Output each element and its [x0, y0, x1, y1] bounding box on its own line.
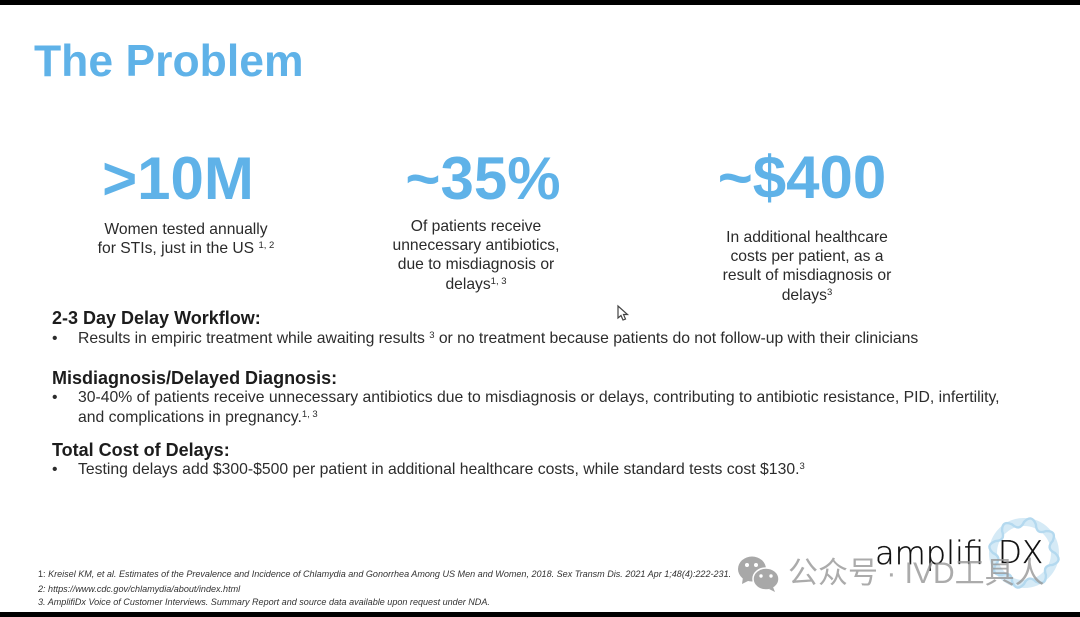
stat description: costs per patient, as a: [730, 248, 884, 265]
section: misdiagnosis: [52, 368, 1000, 426]
bullet text: Testing delays add $300-$500 per patient in additional healthcare costs, while standard tests cost $130.3: [78, 461, 805, 478]
stat description: [98, 221, 274, 257]
bullet: •: [52, 389, 58, 406]
stat description: delays3: [782, 287, 832, 304]
bullet text: and complications in pregnancy.1, 3: [78, 408, 318, 426]
footnotes: 1: Kreisel KM, et al. Estimates of the Prevalence and Incidence of Chlamydia and Gonorrhea Among US Men and Women, 2018. Sex Transm Dis. 2021 Apr 1;48(4):222-231.: [38, 569, 731, 579]
bullet text: Results in empiric treatment while awaiting results 3 or no treatment because patients do not follow-up with their clinicians: [78, 330, 918, 347]
bullet: •: [52, 330, 58, 347]
stat description: [393, 218, 559, 293]
heading: Total Cost of Delays:: [52, 440, 230, 460]
bullet text: [78, 389, 1000, 426]
stat description: unnecessary antibiotics,: [393, 237, 559, 254]
stat value: ~35%: [405, 145, 561, 212]
wechat icon: [738, 556, 778, 592]
footnotes: 3. AmplifiDx Voice of Customer Interviews. Summary Report and source data available upon request under NDA.: [38, 597, 490, 607]
stat description: due to misdiagnosis or: [398, 256, 554, 273]
stat description: for STIs, just in the US 1, 2: [98, 240, 274, 257]
stat description: delays1, 3: [445, 276, 507, 293]
heading: Misdiagnosis/Delayed Diagnosis:: [52, 368, 337, 388]
stat: women tested: [98, 145, 274, 257]
stat description: [723, 229, 892, 304]
stat: additional costs: [718, 144, 892, 304]
watermark text: 公众号 · IVD工具人: [788, 557, 1045, 590]
stat description: result of misdiagnosis or: [723, 267, 891, 284]
bullet: •: [52, 461, 58, 478]
logo DX: DX: [998, 535, 1043, 571]
bullet text: 30-40% of patients receive unnecessary antibiotics due to misdiagnosis or delays, contributing to antibiotic resistance, PID, infertility,: [78, 389, 1000, 406]
logo: amplifi DX: [875, 517, 1060, 589]
stat value: ~$400: [718, 144, 886, 211]
footnotes: [38, 569, 731, 607]
title: The Problem: [34, 37, 304, 86]
wechat watermark: [738, 556, 1045, 592]
top black bar: [0, 0, 1080, 5]
footnotes: 2: https://www.cdc.gov/chlamydia/about/index.html: [38, 584, 240, 594]
logo DNA ring: [988, 517, 1060, 589]
stat value: >10M: [102, 145, 254, 212]
section: workflow delay: [52, 308, 918, 347]
stat description: Women tested annually: [104, 221, 268, 238]
cursor icon: [617, 304, 629, 321]
stat description: Of patients receive: [411, 218, 541, 235]
heading: 2-3 Day Delay Workflow:: [52, 308, 261, 328]
logo wordmark: amplifi: [875, 534, 984, 572]
bottom black bar: [0, 612, 1080, 617]
stat description: In additional healthcare: [726, 229, 888, 246]
section: cost of delays: [52, 440, 805, 478]
stat: unnecessary antibiotics: [393, 145, 561, 293]
